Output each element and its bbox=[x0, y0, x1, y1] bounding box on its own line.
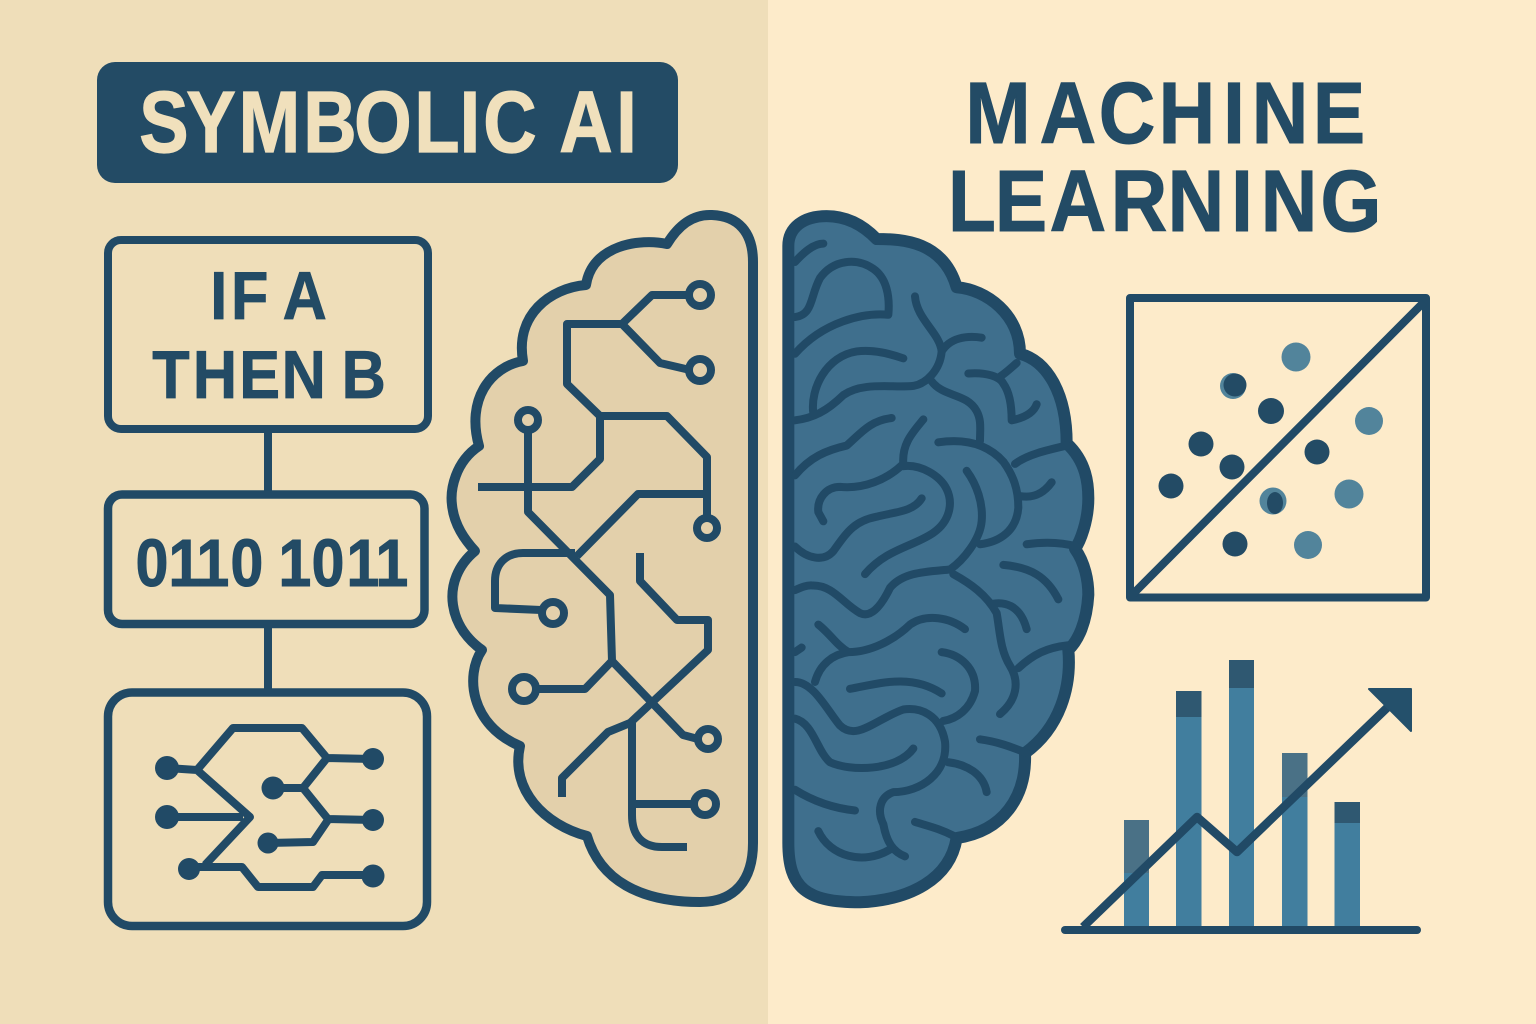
brain outline bbox=[788, 216, 1088, 902]
binary box: 0110 1011: 0110 1011 bbox=[136, 527, 408, 601]
connector: binary to circuit bbox=[264, 624, 272, 692]
dark data points bbox=[1158, 374, 1330, 556]
decision line bbox=[1133, 302, 1424, 594]
brain outline bbox=[452, 215, 753, 902]
chart: bars with trend arrow bbox=[1065, 660, 1417, 930]
baseline bbox=[1065, 926, 1417, 934]
brain folds bbox=[795, 244, 1077, 857]
rule box: IF A THEN B: THEN B bbox=[152, 336, 386, 413]
arrow head bbox=[1369, 689, 1411, 731]
icon: circuit brain half bbox=[452, 215, 753, 902]
panel: machine learning background bbox=[768, 0, 1536, 1024]
heading: Machine Learning bbox=[948, 64, 1381, 250]
circuit traces bbox=[478, 295, 708, 847]
circuit nodes bbox=[512, 284, 718, 815]
circuit box bbox=[108, 692, 427, 926]
heading: Symbolic AI: SYMBOLIC AI bbox=[139, 74, 637, 171]
heading: Machine Learning: MACHINE bbox=[965, 64, 1365, 162]
panel: symbolic AI background bbox=[0, 0, 768, 1024]
chart: scatter plot with decision line bbox=[1130, 298, 1426, 598]
icon: neural brain half bbox=[788, 216, 1088, 902]
icon: logic circuit bbox=[155, 728, 384, 888]
rule box: IF A THEN B: IF A bbox=[210, 257, 327, 334]
bar caps bbox=[1124, 660, 1360, 873]
rule box: IF A THEN B bbox=[108, 240, 428, 429]
binary box: 0110 1011 bbox=[108, 494, 424, 624]
bars bbox=[1124, 660, 1360, 927]
trend line bbox=[1083, 704, 1391, 927]
heading: Machine Learning: LEARNING bbox=[948, 152, 1381, 250]
teal data points bbox=[1220, 342, 1383, 559]
connector: rule to binary bbox=[264, 429, 272, 494]
heading: Symbolic AI bbox=[97, 62, 678, 183]
